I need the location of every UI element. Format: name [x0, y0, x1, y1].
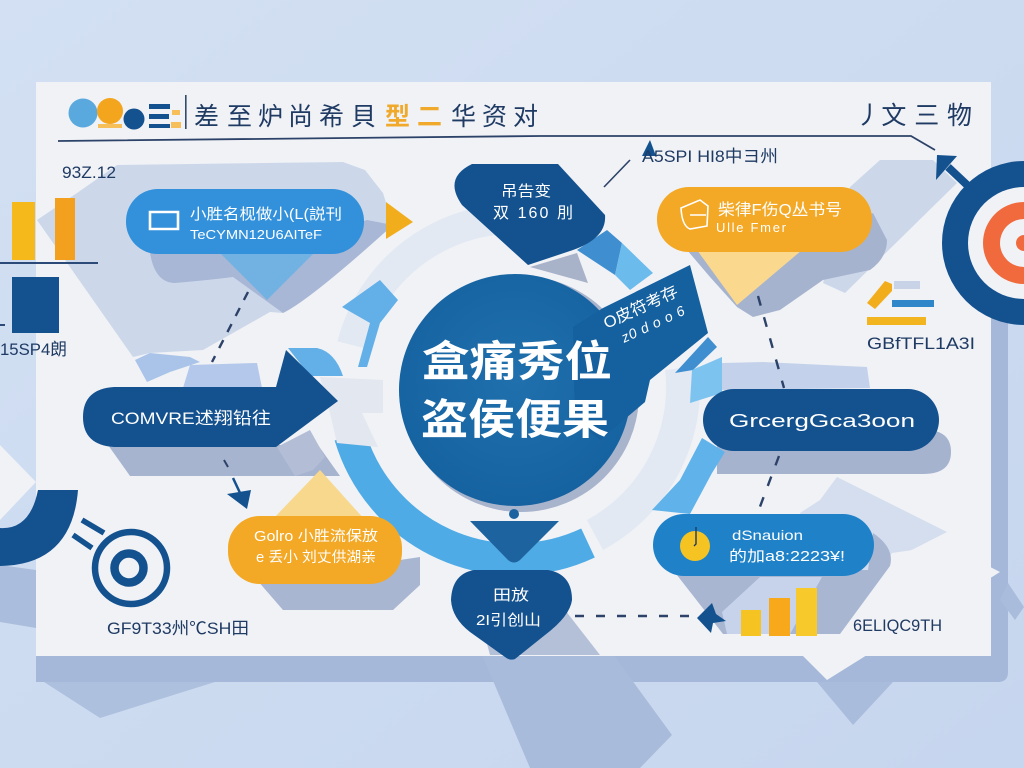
orange pill bottom left	[228, 516, 402, 584]
heading: 华	[451, 103, 476, 131]
top dark node	[454, 164, 605, 265]
circle shadow	[403, 276, 639, 512]
icon: small chart bars right	[867, 281, 934, 325]
left arc icon	[0, 490, 78, 566]
dark arrow pill left	[83, 350, 338, 447]
bottom left label: GF9T33州℃SH田	[107, 619, 249, 638]
icon: tablet	[150, 212, 178, 229]
left bar chart label: 15SP4朗	[0, 340, 67, 359]
small label top left: 93Z.12	[62, 163, 116, 182]
ribbon label: z0 d o o 6	[618, 301, 689, 346]
soft shadow shapes behind nodes	[37, 160, 1000, 680]
blue pill top left	[126, 189, 364, 254]
central circle	[399, 274, 631, 506]
blue pill bottom right: dSnauion	[732, 527, 803, 543]
dashed connector with arrow	[224, 460, 251, 509]
heading: 希	[319, 103, 344, 131]
heading: 差	[194, 103, 219, 131]
central title: 盒痛秀位	[422, 338, 612, 385]
left bar chart	[0, 198, 98, 333]
header rule	[58, 136, 935, 150]
orange pill top right: 柴律F伤Q丛书号	[718, 201, 842, 219]
ring arrow light blue left	[288, 348, 343, 376]
dark pill right	[703, 389, 939, 451]
down triangle arrow	[470, 509, 559, 562]
top centre label with arrow	[604, 140, 778, 187]
grey wedge under top node	[530, 253, 588, 283]
orange pill top right: Ulle Fmer	[716, 220, 787, 235]
bottom heart node: 2I引创山	[476, 612, 541, 629]
orange pill top right	[657, 187, 872, 252]
header logo icon	[68, 95, 187, 130]
dark pill right: GrcergGca3oon	[729, 411, 915, 431]
ring arrow light blue top left	[342, 280, 398, 367]
heading: 炉	[258, 103, 283, 131]
right small label: GBfTFL1A3I	[867, 334, 975, 353]
dashed connector 1	[212, 292, 248, 362]
central title	[421, 338, 612, 443]
heading: 尚	[288, 103, 313, 131]
dark arrow pill left: COMVRE述翔铅往	[111, 409, 271, 428]
ribbon label	[573, 265, 708, 440]
heading	[194, 103, 538, 131]
ring segment upper right	[577, 230, 725, 514]
blue pill top left: TeCYMN12U6AITeF	[190, 227, 322, 242]
dashed connector 2	[755, 296, 784, 520]
blue pill bottom right: 的加a8:2223¥!	[729, 548, 845, 565]
heading: 对	[513, 103, 538, 131]
bottom right label: 6ELIQC9TH	[853, 616, 942, 635]
blue pill bottom right	[653, 514, 874, 576]
top dark node: 双 160 刖	[493, 204, 573, 222]
ribbon label: O皮符考存	[601, 282, 681, 333]
icon: clock	[680, 531, 710, 561]
heading: 二	[417, 103, 442, 131]
connector pale block	[320, 377, 383, 447]
bar chart bottom right	[741, 588, 817, 636]
main panel	[36, 82, 991, 656]
heading: 貝	[351, 103, 376, 131]
left edge paper shape	[0, 445, 36, 520]
central title: 盗侯便果	[421, 396, 609, 443]
orange pill bottom left: Golro 小胜流保放	[254, 528, 379, 545]
blue pill top left: 小胜名枧做小(L(説刊	[190, 206, 342, 223]
heading: 资	[482, 103, 507, 131]
heading: 型	[385, 103, 410, 131]
background shadows	[0, 300, 1024, 768]
top centre label with arrow: A5SPI HI8中ヨ州	[642, 147, 778, 166]
dashed arrow to node	[575, 603, 726, 633]
orange arrowhead	[386, 202, 413, 239]
target icon	[936, 155, 1024, 325]
progress ring	[350, 219, 683, 559]
bottom heart node: 田放	[493, 587, 529, 604]
concentric target icon bottom left	[73, 520, 167, 604]
heading: 至	[227, 103, 252, 131]
header right label: 丿文 三 物	[856, 102, 972, 130]
top dark node: 吊告变	[501, 183, 551, 200]
orange pill bottom left: e 丢小 刘丈供湖亲	[256, 549, 376, 566]
bottom heart node	[451, 570, 572, 660]
icon: box	[681, 200, 708, 229]
